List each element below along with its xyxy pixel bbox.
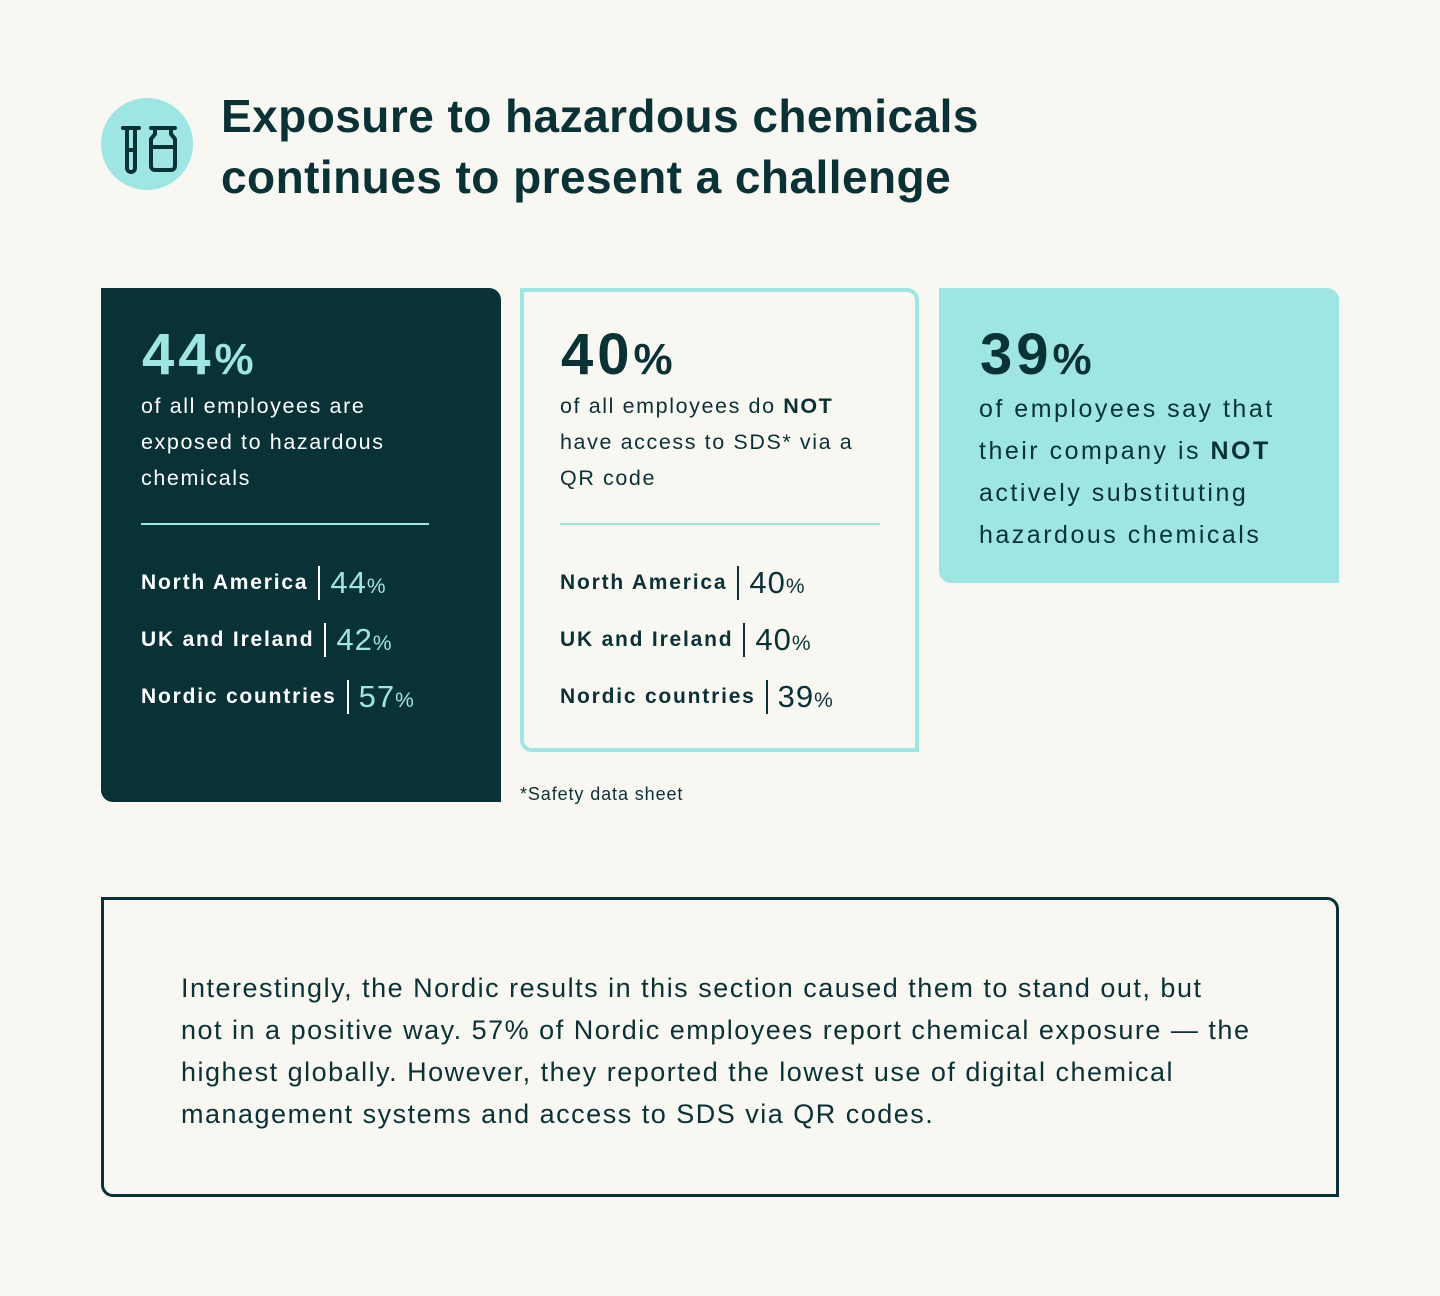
title: Exposure to hazardous chemicals [221, 90, 979, 142]
regional breakdown: 40% [749, 565, 806, 600]
description [979, 395, 1275, 549]
description: chemicals [141, 466, 251, 490]
description: of all employees are [141, 394, 365, 418]
callout: Nordic results: Interestingly, the Nordic results in this section caused them to stand out, but [181, 973, 1202, 1003]
icon: test tubes [101, 98, 193, 190]
callout: Nordic results [101, 897, 1339, 1197]
panel: 39% not substituting [939, 288, 1339, 583]
panel: 44% exposed [101, 288, 501, 802]
description: have access to SDS* via a [560, 430, 853, 454]
footnote: *Safety data sheet [520, 784, 683, 804]
big number 39%: 39% [980, 322, 1092, 387]
regional breakdown: UK and Ireland [560, 628, 733, 651]
description: their company is NOT [979, 437, 1271, 465]
description [141, 394, 385, 490]
regional breakdown [560, 565, 834, 714]
regional breakdown: UK and Ireland [141, 628, 314, 651]
big number 44%: 44% [142, 322, 254, 387]
description: QR code [560, 466, 656, 490]
regional breakdown: 40% [755, 622, 812, 657]
regional breakdown: 39% [778, 679, 834, 714]
regional breakdown: 44% [330, 565, 386, 600]
panel: 40% no SDS access [520, 288, 919, 752]
regional breakdown: North America [141, 571, 308, 594]
title: continues to present a challenge [221, 151, 951, 203]
regional breakdown [141, 565, 415, 714]
description [560, 394, 853, 490]
callout: Nordic results: highest globally. However, they reported the lowest use of digital chemical [181, 1057, 1174, 1087]
regional breakdown: 57% [359, 679, 415, 714]
callout: Nordic results: management systems and access to SDS via QR codes. [181, 1099, 934, 1129]
title [221, 90, 979, 203]
description: of all employees do NOT [560, 394, 833, 418]
description: exposed to hazardous [141, 430, 385, 454]
big number 40%: 40% [561, 322, 673, 387]
regional breakdown: Nordic countries [141, 685, 337, 708]
description: actively substituting [979, 479, 1248, 507]
description: hazardous chemicals [979, 521, 1261, 549]
callout: Nordic results: not in a positive way. 57% of Nordic employees report chemical exposure — the [181, 1015, 1250, 1045]
description: of employees say that [979, 395, 1275, 423]
regional breakdown: Nordic countries [560, 685, 756, 708]
regional breakdown: North America [560, 571, 727, 594]
regional breakdown: 42% [336, 622, 393, 657]
